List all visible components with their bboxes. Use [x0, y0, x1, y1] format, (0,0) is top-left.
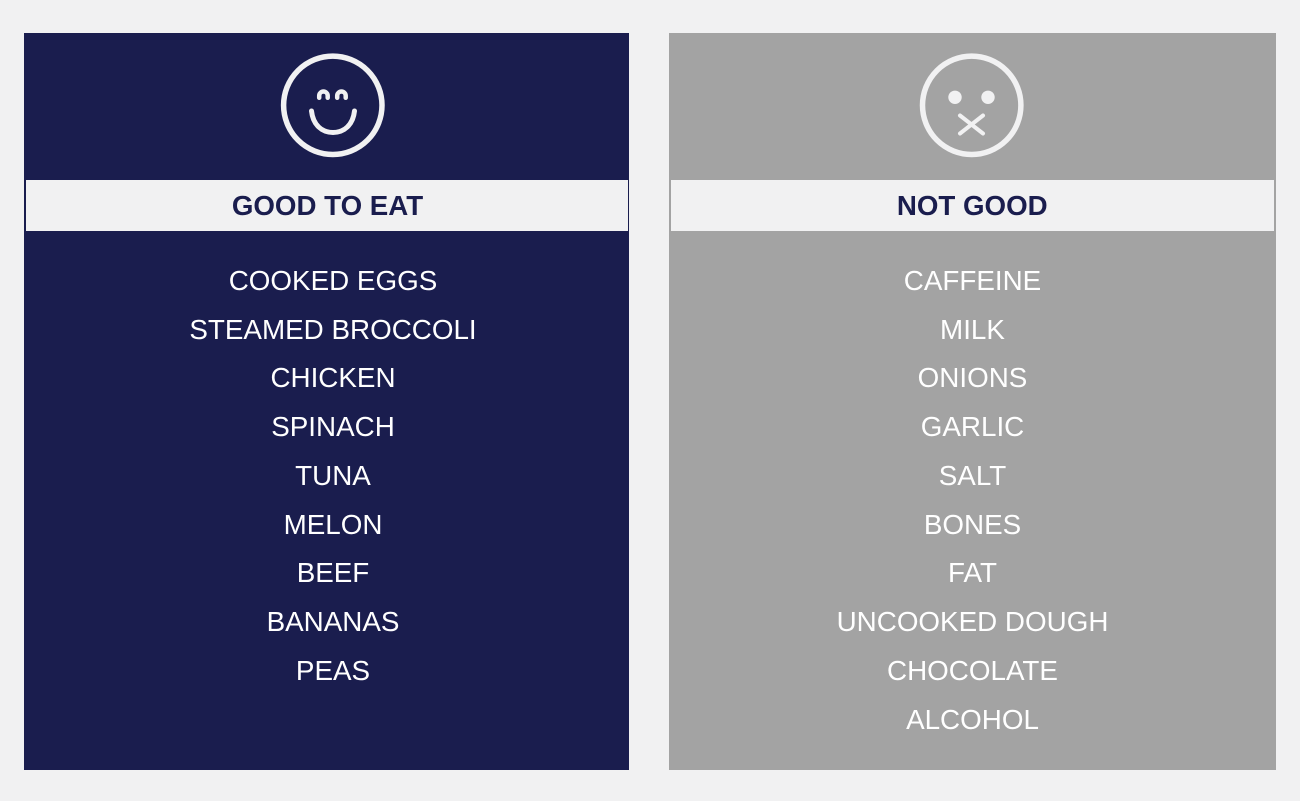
heading: not good: [670, 180, 1274, 231]
list: bad foods: MILK: [940, 314, 1005, 345]
list: bad foods: FAT: [948, 557, 997, 588]
list: bad foods: CAFFEINE: [904, 265, 1041, 296]
heading: good to eat: GOOD TO EAT: [232, 190, 423, 221]
list: bad foods: BONES: [924, 509, 1021, 540]
list: good foods: CHICKEN: [270, 362, 396, 393]
list: good foods: MELON: [284, 509, 382, 540]
list: bad foods: CHOCOLATE: [887, 655, 1058, 686]
list: bad foods: [837, 265, 1108, 735]
list: good foods: SPINACH: [271, 411, 395, 442]
heading: not good: NOT GOOD: [897, 190, 1048, 221]
panel: good to eat: [24, 33, 629, 770]
list: good foods: BEEF: [297, 557, 369, 588]
icon: face with crossed mouth: [920, 53, 1024, 158]
icon: smiling face: [280, 53, 385, 158]
list: good foods: COOKED EGGS: [229, 265, 437, 296]
list: bad foods: UNCOOKED DOUGH: [837, 606, 1108, 637]
heading: good to eat: [26, 180, 628, 231]
list: bad foods: GARLIC: [921, 411, 1024, 442]
list: bad foods: ALCOHOL: [906, 704, 1039, 735]
list: bad foods: SALT: [939, 460, 1006, 491]
list: good foods: [189, 265, 477, 686]
list: bad foods: ONIONS: [918, 362, 1027, 393]
list: good foods: STEAMED BROCCOLI: [189, 314, 477, 345]
list: good foods: BANANAS: [267, 606, 399, 637]
list: good foods: TUNA: [295, 460, 371, 491]
list: good foods: PEAS: [296, 655, 370, 686]
panel: not good: [669, 33, 1276, 770]
